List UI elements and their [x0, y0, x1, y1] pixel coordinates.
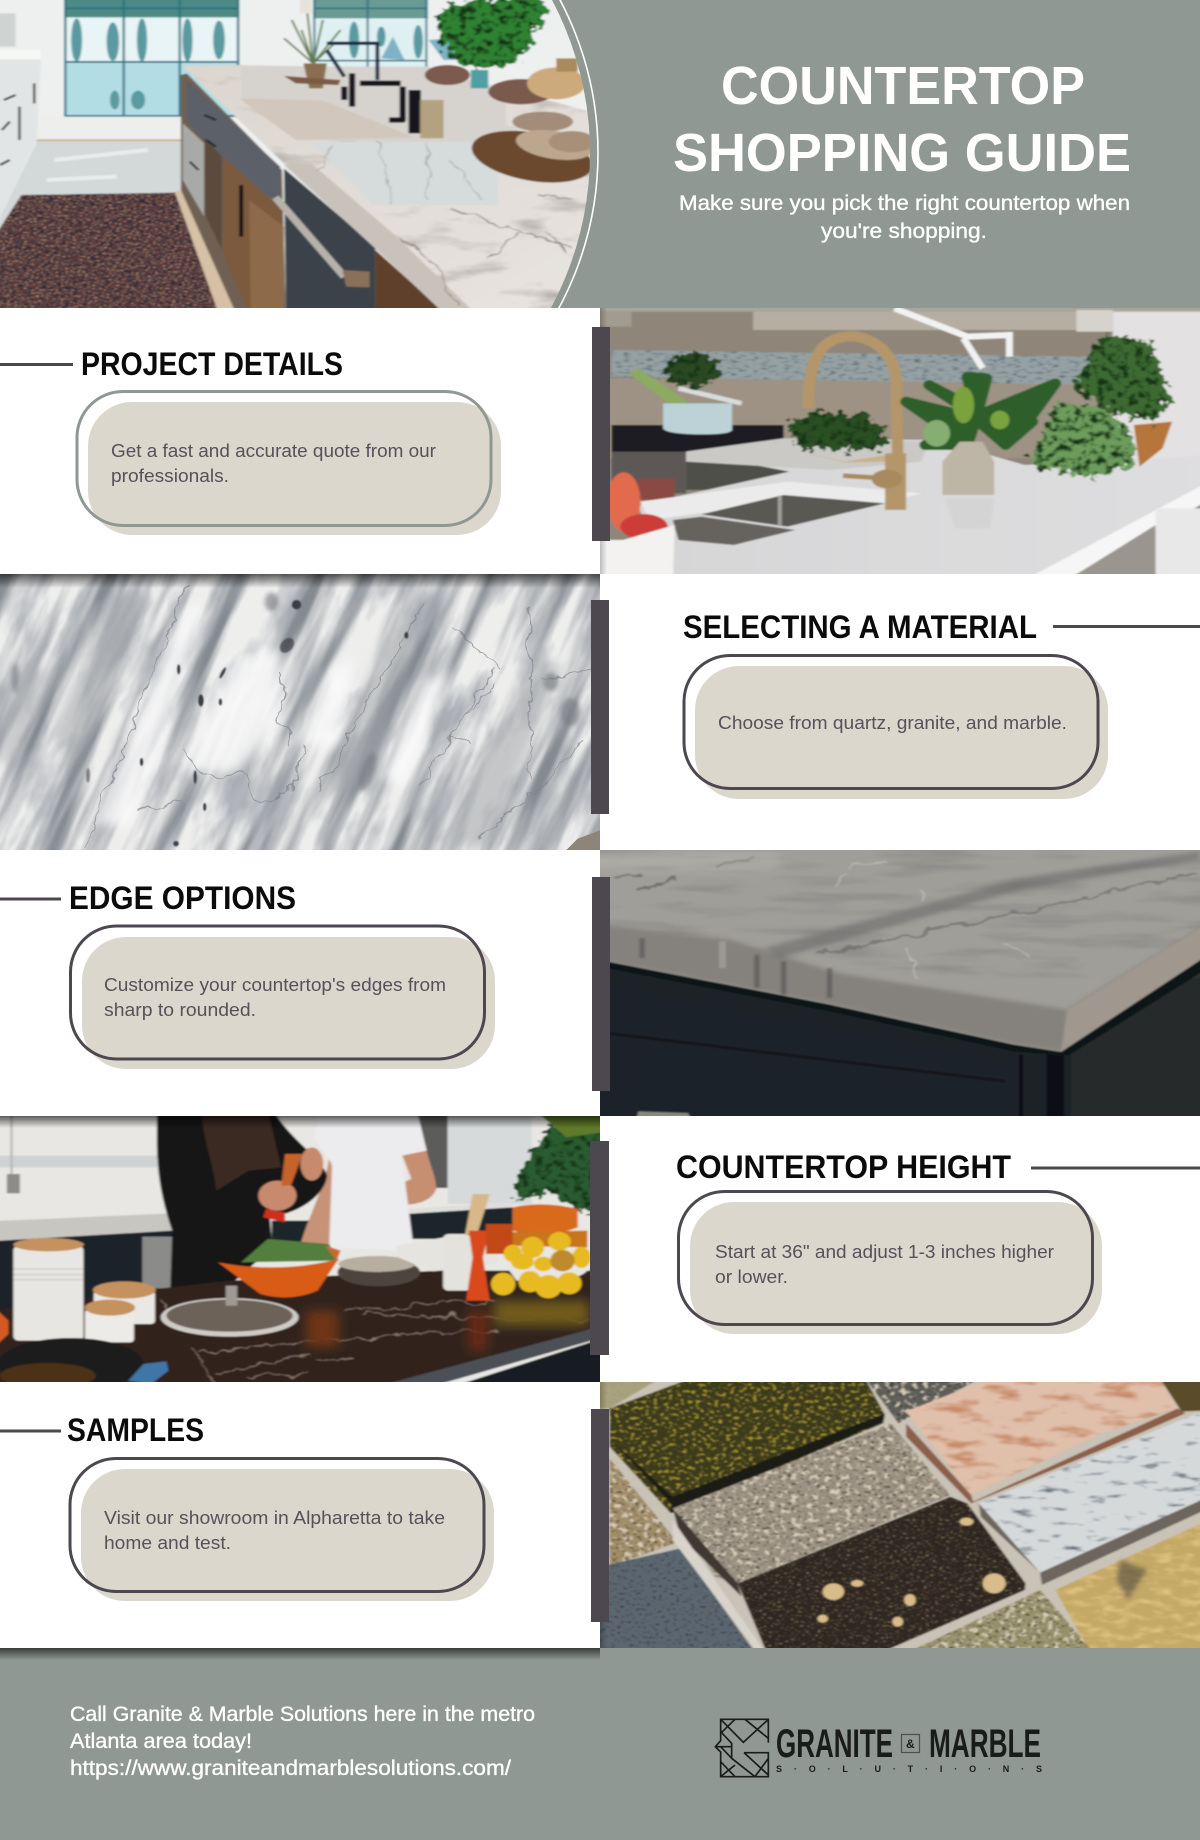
- heading: countertop height: COUNTERTOP HEIGHT: [676, 1149, 1011, 1185]
- icon: geometric G mark: [715, 1719, 768, 1777]
- card: edge options: sharp to rounded.: [104, 1000, 256, 1020]
- card: project details: professionals.: [111, 466, 229, 486]
- logo: Granite & Marble Solutions: S · O · L · U · T · I · O · N · S: [776, 1764, 1042, 1774]
- title: [673, 56, 1131, 183]
- panel: edge options: [0, 850, 600, 1116]
- card: selecting a material: [684, 656, 1108, 799]
- subtitle: [679, 192, 1130, 243]
- title: SHOPPING GUIDE: [673, 123, 1131, 183]
- card: selecting a material: Choose from quartz, granite, and marble.: [718, 713, 1067, 733]
- panel: project details: [0, 308, 600, 574]
- card: countertop height: or lower.: [715, 1267, 788, 1287]
- card: project details: [77, 392, 501, 535]
- card: edge options: Customize your countertop's edges from: [104, 975, 446, 995]
- heading: project details: PROJECT DETAILS: [81, 346, 343, 382]
- heading: project details: [0, 346, 343, 382]
- footer band: [0, 1648, 1200, 1840]
- logo: Granite & Marble Solutions: GRANITE: [776, 1722, 893, 1766]
- photo: kitchen sink with plants: [589, 295, 1200, 585]
- heading: selecting a material: SELECTING A MATERIAL: [683, 609, 1037, 645]
- photo: people cooking at dark counter: [0, 1116, 600, 1382]
- subtitle: Make sure you pick the right countertop when: [679, 192, 1130, 215]
- photo: marble slab: [0, 574, 600, 850]
- logo: Granite & Marble Solutions: [715, 1719, 1042, 1777]
- footer call to action: Atlanta area today!: [70, 1730, 252, 1753]
- heading: countertop height: [676, 1149, 1200, 1185]
- card: samples: Visit our showroom in Alpharetta to take: [104, 1508, 445, 1528]
- hero photo: kitchen island in circle: [0, 0, 626, 318]
- card: countertop height: [678, 1192, 1102, 1334]
- panel: selecting a material: [600, 574, 1200, 850]
- title: COUNTERTOP: [721, 56, 1085, 116]
- card: project details: Get a fast and accurate quote from our: [111, 441, 436, 461]
- footer call to action: https://www.graniteandmarblesolutions.com/: [70, 1757, 511, 1780]
- photo: stone samples: [589, 1370, 1200, 1660]
- panel: countertop height: [600, 1116, 1200, 1382]
- header panel: [0, 0, 1200, 308]
- logo: Granite & Marble Solutions: MARBLE: [929, 1722, 1041, 1766]
- photo: rounded stone edge: [589, 838, 1200, 1128]
- card: samples: [70, 1458, 494, 1601]
- card: samples: home and test.: [104, 1533, 231, 1553]
- footer call to action: Call Granite & Marble Solutions here in the metro: [70, 1703, 535, 1726]
- white arc around hero photo: [0, 0, 598, 480]
- heading: edge options: EDGE OPTIONS: [69, 880, 296, 916]
- heading: samples: [0, 1412, 204, 1448]
- footer call to action: [70, 1703, 535, 1780]
- subtitle: you're shopping.: [821, 220, 987, 243]
- heading: samples: SAMPLES: [67, 1412, 204, 1448]
- card: countertop height: Start at 36" and adjust 1-3 inches higher: [715, 1242, 1054, 1262]
- panel drop shadows: [0, 308, 607, 1660]
- card: edge options: [70, 926, 495, 1069]
- panel: samples: [0, 1382, 600, 1648]
- logo: Granite & Marble Solutions: &: [906, 1737, 915, 1751]
- accent bars: [590, 327, 610, 1622]
